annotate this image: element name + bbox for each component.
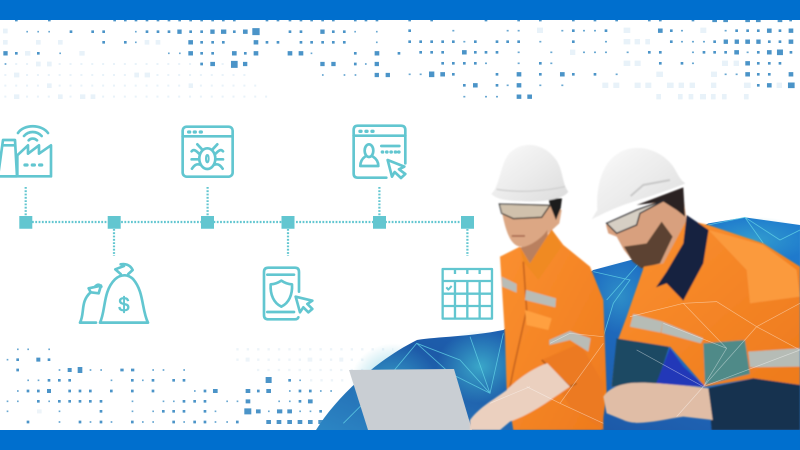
timeline nodes xyxy=(19,216,474,229)
left worker reflective stripes xyxy=(502,277,591,352)
network overlay on shirts xyxy=(490,302,800,423)
right worker beard xyxy=(624,222,673,268)
right worker shirt xyxy=(612,220,800,387)
icon: browser login with cursor xyxy=(354,126,405,178)
worker: left xyxy=(470,145,607,430)
right worker reflective stripes xyxy=(630,314,800,367)
left worker glasses xyxy=(499,204,550,219)
left worker pocket flap xyxy=(525,310,552,330)
left worker collar xyxy=(520,229,562,280)
right worker hand and forearm xyxy=(603,383,713,423)
icon: money bags xyxy=(80,264,148,323)
right worker hair xyxy=(637,187,685,217)
blue network landscape xyxy=(316,217,800,430)
icon: calendar xyxy=(443,269,492,319)
bottom blue bar xyxy=(0,430,800,450)
left worker neck and face xyxy=(501,205,562,263)
icon: money bags: $ xyxy=(118,294,130,316)
icon: factory with wifi xyxy=(0,126,51,176)
right worker sleeve band xyxy=(612,338,669,387)
icons row, right part xyxy=(264,126,492,319)
right worker glasses xyxy=(607,200,665,233)
icon: phone with shield and cursor xyxy=(264,268,312,319)
timeline stems xyxy=(26,187,467,256)
dot pattern: bottom left xyxy=(7,349,393,422)
right worker navy collar xyxy=(656,215,709,301)
worker: right xyxy=(592,148,800,430)
timeline xyxy=(19,187,474,256)
right worker dark cuff xyxy=(708,378,800,430)
icons row, left part xyxy=(0,126,233,323)
photo: workers on a blue network background xyxy=(316,145,800,430)
right worker neck and face xyxy=(606,198,687,270)
right worker lighter shoulder xyxy=(709,230,800,303)
right worker helmet xyxy=(592,148,685,219)
left worker shirt xyxy=(500,229,607,430)
dot pattern: top left xyxy=(3,20,400,97)
laptop xyxy=(349,369,472,430)
left worker helmet xyxy=(491,145,568,201)
timeline connector line xyxy=(32,221,461,223)
top blue bar xyxy=(0,0,800,20)
left worker forearm xyxy=(470,363,570,430)
left worker hair xyxy=(548,198,562,220)
right worker navy gap xyxy=(656,348,705,387)
left worker rolled sleeve xyxy=(542,343,603,430)
icon: browser window with bug xyxy=(183,127,233,177)
dot pattern: top right xyxy=(408,20,795,97)
